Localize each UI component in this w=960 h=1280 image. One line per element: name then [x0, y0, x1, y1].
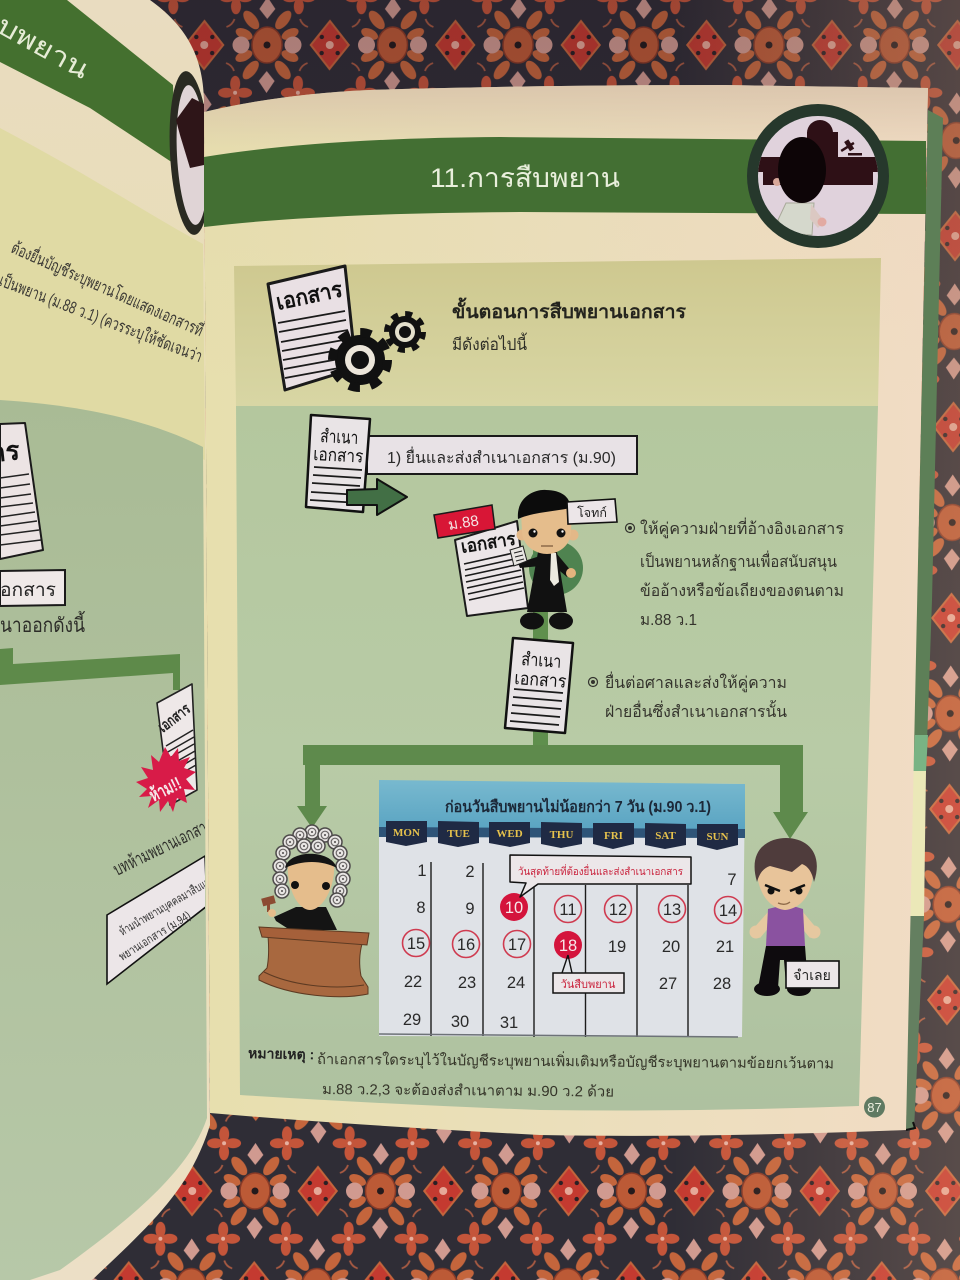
calendar numbers: 11 — [559, 901, 577, 919]
icon: document with gears — [268, 266, 423, 390]
left page paper — [0, 0, 210, 1280]
left label box — [0, 570, 65, 606]
footnote: ถ้าเอกสารใดระบุไว้ในบัญชีระบุพยานเพิ่มเติมหรือบัญชีระบุพยานตามข้อยกเว้นตาม — [317, 1049, 834, 1073]
left note box: พยานเอกสาร (ม.94) — [116, 908, 193, 964]
calendar numbers — [403, 862, 737, 1032]
page top tone — [204, 85, 928, 400]
weekday tabs: THU — [550, 829, 573, 841]
small gear — [387, 314, 423, 350]
calendar numbers: 22 — [404, 973, 422, 991]
podium — [259, 927, 369, 997]
bullet text: plaintiff duty — [626, 517, 844, 629]
judge eyes — [291, 881, 299, 889]
intro heading: ขั้นตอนการสืบพยานเอกสาร — [452, 297, 687, 323]
bullet text: plaintiff duty: ให้คู่ความฝ่ายที่อ้างอิงเอกสาร — [640, 517, 844, 539]
calendar numbers: 29 — [403, 1011, 421, 1029]
document: เอกสาร — [274, 276, 345, 315]
feet — [520, 612, 544, 630]
book cover edge on right — [906, 110, 943, 1130]
copy document one: สำเนา — [320, 426, 359, 448]
calendar numbers: 17 — [508, 936, 526, 954]
character: plaintiff lawyer — [510, 490, 578, 630]
left green connector — [0, 648, 180, 690]
legs — [758, 946, 808, 988]
bullet marker — [626, 524, 634, 532]
arrow to plaintiff — [347, 479, 407, 515]
hand — [566, 568, 576, 578]
page number: 87 — [867, 1100, 882, 1115]
calendar numbers: 13 — [663, 901, 681, 919]
calendar numbers: 20 — [662, 938, 680, 956]
judge robe — [274, 907, 337, 930]
callout: last filing date: วันสุดท้ายที่ต้องยื่นและส่งสำเนาเอกสาร — [518, 864, 683, 878]
callout: last filing date — [510, 855, 691, 897]
intro subheading: มีดังต่อไปนี้ — [452, 332, 527, 354]
shirt — [766, 906, 805, 946]
left note box — [106, 855, 205, 986]
weekday tabs: SAT — [655, 830, 676, 842]
document with section tag: เอกสาร — [459, 529, 517, 557]
green circle behind plaintiff — [529, 541, 583, 595]
calendar numbers: 30 — [451, 1013, 469, 1031]
weekday tabs — [386, 821, 738, 850]
left page green header band — [0, 0, 176, 165]
left document with prohibition stamp: เอกสาร — [155, 700, 194, 736]
held small paper — [510, 546, 527, 566]
left body text line two: เป็นพยาน (ม.88 ว.1) (ควรระบุให้ชัดเจนว่า — [0, 269, 206, 367]
calendar bottom edge — [379, 1034, 738, 1037]
calendar numbers: 10 — [505, 899, 523, 917]
left page yellow panel — [0, 128, 205, 460]
footnote: หมายเหตุ : — [248, 1045, 314, 1063]
footnote: ม.88 ว.2,3 จะต้องส่งสำเนาตาม ม.90 ว.2 ด้วย — [322, 1081, 614, 1101]
callout: hearing date: วันสืบพยาน — [561, 978, 616, 991]
calendar numbers: 28 — [713, 975, 731, 993]
icon contents — [758, 120, 878, 235]
left page — [0, 0, 219, 1280]
calendar numbers: 7 — [727, 871, 737, 889]
arms — [752, 912, 771, 938]
left body text line one — [0, 236, 207, 367]
calendar numbers: 16 — [457, 936, 475, 954]
left document with prohibition stamp — [136, 684, 197, 812]
right page — [204, 85, 928, 1136]
character: judge — [261, 825, 350, 930]
defendant label: จำเลย — [793, 967, 831, 983]
bullet text: plaintiff duty: ม.88 ว.1 — [640, 612, 697, 629]
column lines — [431, 862, 688, 1037]
calendar numbers: 19 — [608, 938, 626, 956]
weekday bar — [379, 827, 745, 838]
calendar numbers: 18 — [559, 937, 577, 955]
judge wig — [273, 825, 350, 907]
date circles — [402, 896, 742, 958]
bullet text: plaintiff duty: ข้ออ้างหรือข้อเถียงของตนตาม — [640, 582, 844, 600]
calendar numbers: 23 — [458, 974, 476, 992]
calendar numbers: 2 — [465, 863, 475, 881]
left subheading: บทห้ามพยานเอกสาร — [110, 814, 216, 880]
witness from behind — [773, 137, 826, 235]
hair — [755, 838, 817, 882]
copy document two: สำเนา — [521, 649, 562, 672]
bullet text: filing — [588, 671, 787, 721]
plaintiff label — [567, 499, 617, 524]
right page paper — [204, 85, 928, 1136]
head — [516, 530, 528, 540]
title: 11.การสืบพยาน — [430, 163, 620, 193]
bullet text: plaintiff duty: เป็นพยานหลักฐานเพื่อสนับสนุน — [640, 550, 837, 572]
calendar numbers: 31 — [500, 1014, 518, 1032]
calendar numbers: 14 — [719, 902, 737, 920]
left page caption: นาออกดังนี้ — [0, 611, 85, 637]
calendar numbers: 1 — [417, 862, 427, 880]
weekday tabs: FRI — [604, 830, 623, 842]
bullet text: filing: ยื่นต่อศาลและส่งให้คู่ความ — [605, 671, 787, 693]
calendar numbers: 24 — [507, 974, 525, 992]
bullet text: filing: ฝ่ายอื่นซึ่งสำเนาเอกสารนั้น — [605, 700, 787, 721]
left document partial — [0, 423, 43, 559]
calendar numbers: 9 — [465, 900, 475, 918]
character: defendant — [750, 838, 820, 996]
calendar numbers: 15 — [407, 935, 425, 953]
angry face — [765, 885, 805, 891]
calendar header — [379, 780, 745, 830]
plaintiff label: โจทก์ — [577, 505, 607, 520]
copy document two: เอกสาร — [514, 668, 567, 692]
judge hair — [285, 854, 337, 868]
calendar title: ก่อนวันสืบพยานไม่น้อยกว่า 7 วัน (ม.90 ว.1) — [445, 797, 711, 816]
calendar numbers: 12 — [609, 901, 627, 919]
left page green panel — [0, 400, 207, 1280]
big gear — [332, 332, 388, 388]
gavel — [841, 139, 862, 156]
section tag: ม.88 — [447, 512, 480, 534]
copy document one — [306, 415, 370, 512]
chapter icon: witness facing the court — [747, 104, 889, 248]
copy document two — [505, 638, 573, 733]
left chapter icon — [170, 71, 204, 235]
step 1 label — [367, 436, 637, 474]
weekday tabs: WED — [496, 828, 523, 840]
step 1 label: 1) ยื่นและส่งสำเนาเอกสาร (ม.90) — [387, 446, 616, 467]
left body text line one: ต้องยื่นบัญชีระบุพยานโดยแสดงเอกสารที่ — [8, 236, 207, 341]
calendar numbers: 21 — [716, 938, 734, 956]
gavel — [261, 895, 276, 917]
green process panel — [236, 406, 878, 1110]
footnote — [248, 1045, 834, 1101]
court bench — [758, 120, 878, 185]
head — [757, 862, 813, 910]
beige intro panel — [234, 258, 881, 406]
calendar numbers: 8 — [416, 899, 426, 917]
calendar numbers: 27 — [659, 975, 677, 993]
left label box: อกสาร — [0, 580, 56, 601]
weekday tabs: MON — [393, 827, 420, 839]
judge face — [288, 862, 334, 910]
callout: hearing date — [553, 955, 624, 993]
highlighted dates — [500, 893, 582, 959]
bullet marker — [588, 678, 598, 686]
weekday tabs: TUE — [447, 828, 470, 840]
calendar — [379, 780, 745, 1037]
vertical connector — [533, 540, 548, 746]
tie — [550, 553, 559, 586]
copy document one: เอกสาร — [313, 444, 364, 467]
left document with prohibition stamp: ห้าม!! — [146, 773, 184, 806]
left note box: ห้ามนำพยานบุคคลมาสืบแทน — [116, 871, 219, 939]
document with section tag — [434, 505, 528, 616]
document — [268, 266, 356, 390]
header band — [204, 137, 926, 227]
robe — [527, 552, 567, 612]
page number — [864, 1096, 885, 1118]
weekday tabs: SUN — [706, 831, 729, 843]
branching arrows to judge and defendant — [297, 745, 808, 839]
stamp starburst — [136, 747, 196, 812]
defendant label — [786, 961, 839, 988]
